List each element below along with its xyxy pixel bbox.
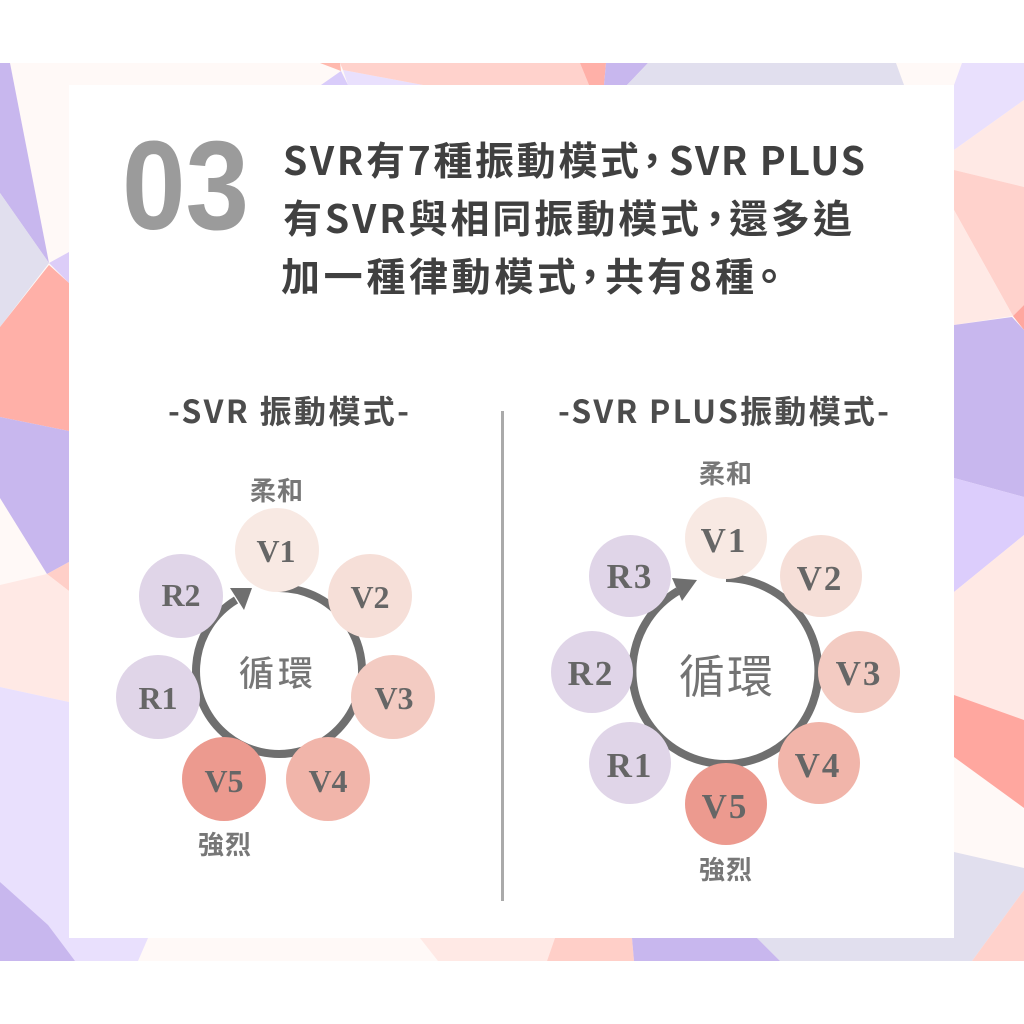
divider line [501,411,504,901]
heading text: SVR PLUS [669,131,865,187]
mode V3 [818,631,900,713]
mode V1 [685,497,767,579]
mode V1 [235,508,319,592]
mode R2: R2 [568,654,614,693]
heading text: 還多追 [729,189,852,245]
mode V3: V3 [836,654,882,693]
mode R2: R2 [161,577,201,613]
subheading: SVR PLUS: -SVR PLUS振動模式- [558,387,889,433]
label: gentle: 柔和 [250,471,304,508]
mode R2 [551,631,633,713]
diagram: SVR PLUS cycle [551,454,900,887]
heading text: ， [632,131,672,187]
diagram: SVR cycle [116,471,435,862]
mode V2: V2 [797,559,843,598]
label: strong: 強烈 [699,850,753,887]
mode V4 [778,722,860,804]
label: strong: 強烈 [198,825,252,862]
centre label: 循環 [679,641,775,707]
mode V2 [328,554,412,638]
mode R1 [589,722,671,804]
mode V1: V1 [256,533,296,569]
heading text: ， [570,247,610,303]
mode R1: R1 [607,746,653,785]
heading text: SVR有7種振動模式 [283,131,639,187]
mode R1 [116,655,200,739]
centre label: 循環 [239,646,317,697]
mode R3: R3 [607,557,653,596]
mode V4: V4 [308,763,348,799]
mode R3 [589,535,671,617]
mode V4 [286,737,370,821]
mode V1: V1 [701,521,747,560]
heading text: 有SVR與相同振動模式 [283,189,699,245]
mode V3 [351,655,435,739]
heading text [281,131,865,305]
heading text: 。 [748,244,790,305]
heading text: 加一種律動模式 [281,247,576,303]
heading text: 共有8種 [605,247,754,303]
ring with arrow [196,588,362,754]
mode V5 [182,737,266,821]
mode V5: V5 [204,763,244,799]
mode R2 [139,554,223,638]
mode V2 [780,535,862,617]
label: gentle: 柔和 [699,454,753,491]
mode V5 [685,763,767,845]
ring with arrow [632,578,818,764]
mode V4: V4 [795,746,841,785]
mode V2: V2 [350,579,390,615]
heading text: ， [695,189,735,245]
mode V5: V5 [702,787,748,826]
section number: 03 [122,115,249,256]
white card panel [69,85,954,938]
subheading: SVR: -SVR 振動模式- [168,387,409,433]
mode V3: V3 [374,680,414,716]
mode R1: R1 [138,680,178,716]
